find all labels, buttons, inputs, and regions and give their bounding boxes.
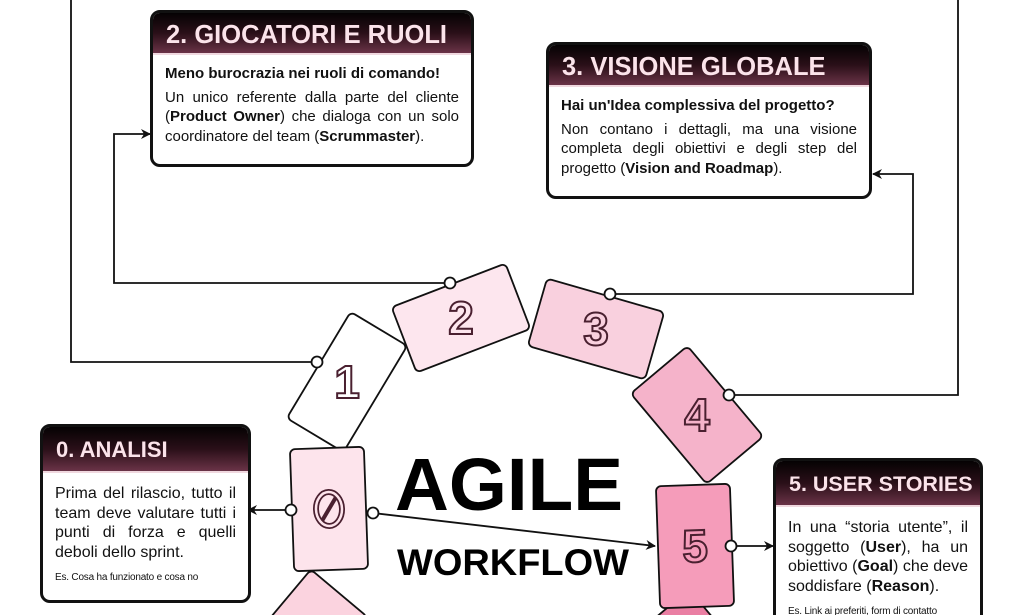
card 5: 5 — [681, 520, 709, 572]
card 3: 3 — [583, 303, 609, 355]
card: bottom right — [632, 589, 768, 615]
card 2: 2 — [448, 292, 474, 344]
panel: 3. visione globale: Hai un'Idea complessiva del progetto? — [561, 97, 835, 114]
panel: 2. giocatori e ruoli: Meno burocrazia nei ruoli di comando! — [165, 65, 440, 82]
card 1 — [287, 312, 407, 452]
panel: 2. giocatori e ruoli: Un unico referente dalla parte del cliente — [165, 88, 459, 106]
panel: 5. user stories: soggetto (User), ha un — [788, 538, 968, 556]
card 4 — [631, 346, 763, 484]
card: bottom left — [232, 569, 368, 615]
title: WORKFLOW — [397, 542, 629, 583]
panel: 3. visione globale: 3. VISIONE GLOBALE — [562, 53, 826, 81]
panel: 0. analisi: Es. Cosa ha funzionato e cosa no — [55, 572, 198, 583]
title: AGILE — [395, 443, 623, 526]
panel: 0. analisi: deboli dello sprint. — [55, 544, 184, 560]
panel: 0. analisi — [40, 424, 251, 603]
panel: 5. user stories: obiettivo (Goal) che deve — [788, 558, 968, 575]
panel: 5. user stories: 5. USER STORIES — [789, 472, 973, 496]
panel: 0. analisi: 0. ANALISI — [56, 437, 168, 462]
card 1: 1 — [334, 356, 360, 408]
panel: 5. user stories — [773, 458, 983, 615]
panel: 2. giocatori e ruoli: 2. GIOCATORI E RUOLI — [166, 21, 447, 49]
panel: 5. user stories: In una “storia utente”, il — [788, 519, 968, 536]
panel: 0. analisi: Prima del rilascio, tutto il — [55, 485, 236, 502]
card 0 — [290, 447, 368, 571]
panel: 3. visione globale: progetto (Vision and Roadmap). — [561, 160, 782, 176]
panel: 3. visione globale: completa degli obiettivi e degli step del — [561, 140, 857, 157]
panel: 2. giocatori e ruoli: (Product Owner) che dialoga con un solo — [165, 108, 459, 125]
panel: 2. giocatori e ruoli — [150, 10, 474, 167]
panel: 2. giocatori e ruoli: coordinatore del team (Scrummaster). — [165, 128, 424, 144]
panel: 0. analisi: punti di forza e quelli — [55, 524, 236, 541]
card 3 — [528, 279, 664, 379]
card 2 — [392, 263, 530, 373]
panel: 0. analisi: team deve valutare tutti i — [55, 504, 236, 522]
panel: 3. visione globale: Non contano i dettagli, ma una visione — [561, 120, 857, 138]
panel: 5. user stories: soddisfare (Reason). — [788, 578, 939, 594]
panel: 3. visione globale — [546, 42, 872, 199]
title — [395, 443, 629, 583]
card 5 — [656, 484, 734, 608]
card 4: 4 — [684, 389, 710, 441]
